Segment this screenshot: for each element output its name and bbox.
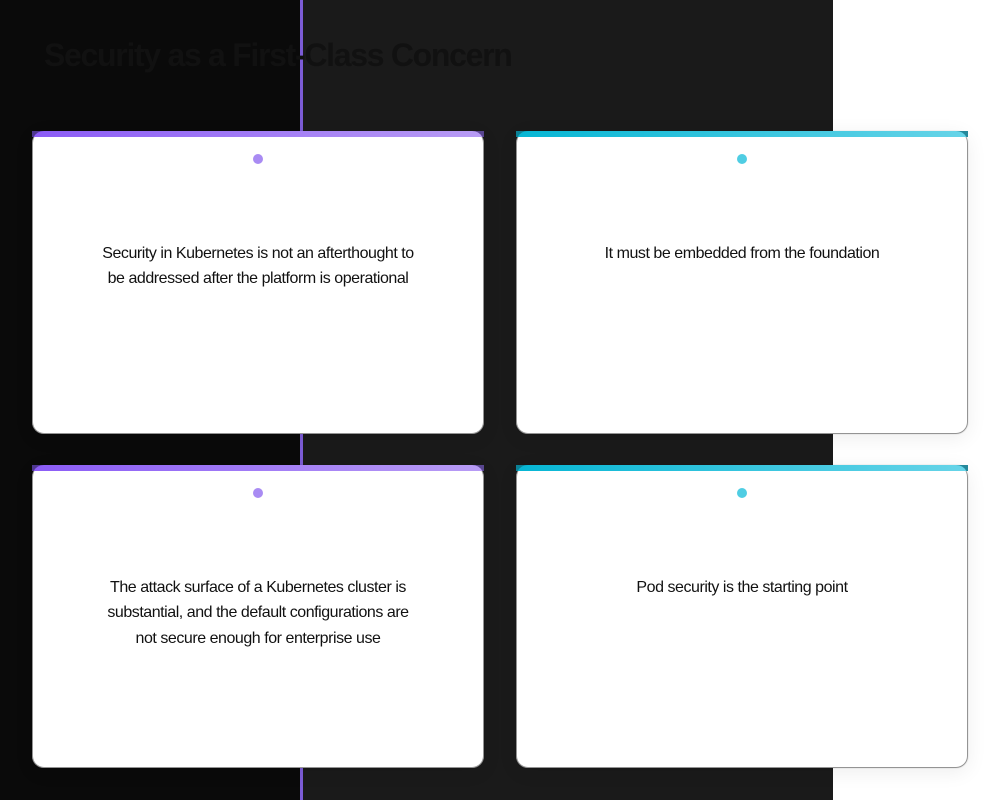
accent dot: cyan — [737, 154, 747, 164]
bar corners: cyan — [516, 131, 968, 137]
bar corners: purple — [32, 131, 484, 137]
panel: card 1 — [32, 131, 484, 434]
text: card 3: not secure enough for enterprise use — [136, 630, 380, 647]
card outline — [516, 465, 968, 768]
accent bar: cyan — [516, 131, 968, 137]
text: card 3: substantial, and the default configurations are — [107, 604, 409, 621]
panel: card 2 — [516, 131, 968, 434]
text: card 1: Security in Kubernetes is not an afterthought to — [102, 245, 414, 262]
bar corners: purple — [32, 465, 484, 471]
text: card 1 — [102, 245, 414, 287]
bar corners: cyan — [516, 465, 968, 471]
text: card 1: be addressed after the platform is operational — [108, 270, 408, 287]
panel: card 3 — [32, 465, 484, 768]
vertical timeline line — [300, 0, 303, 800]
accent bar: cyan — [516, 465, 968, 471]
background: left dark band — [0, 0, 300, 800]
accent bar: purple — [32, 131, 484, 137]
title: Security as a First-Class Concern — [44, 37, 512, 73]
card outline — [516, 131, 968, 434]
accent bar: purple — [32, 465, 484, 471]
accent dot: cyan — [737, 488, 747, 498]
text: card 2: It must be embedded from the foundation — [605, 245, 879, 262]
text: card 3 — [107, 579, 409, 647]
accent dot: purple — [253, 488, 263, 498]
panel: card 4 — [516, 465, 968, 768]
card outline — [32, 131, 484, 434]
text: card 4: Pod security is the starting point — [636, 579, 848, 596]
text: card 3: The attack surface of a Kubernetes cluster is — [110, 579, 406, 596]
background: right dark panel — [303, 0, 833, 800]
card outline — [32, 465, 484, 768]
accent dot: purple — [253, 154, 263, 164]
